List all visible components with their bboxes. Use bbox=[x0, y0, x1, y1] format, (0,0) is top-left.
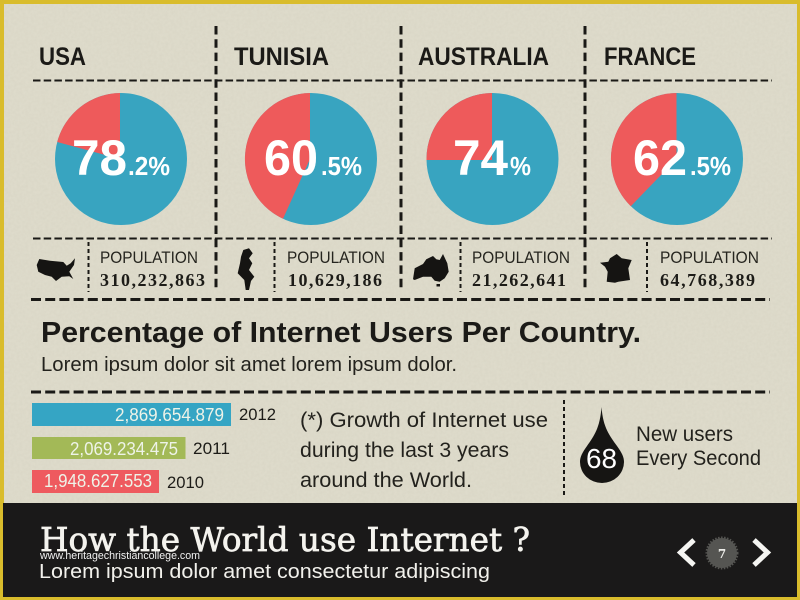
population: Australia: 21,262,641 bbox=[472, 270, 566, 290]
panel: Australia bbox=[413, 43, 570, 290]
panel: USA bbox=[37, 43, 205, 290]
bar chart: internet growth bbox=[32, 403, 276, 493]
text block: new users: Every Second bbox=[636, 446, 761, 470]
population: Tunisia: 10,629,186 bbox=[288, 270, 382, 290]
population: France bbox=[660, 248, 759, 290]
population: USA bbox=[100, 248, 205, 290]
panel: Tunisia bbox=[234, 43, 385, 290]
page badge: 7 bbox=[718, 547, 726, 561]
page badge bbox=[706, 538, 738, 568]
pie chart: Tunisia 60.5%: 60 bbox=[264, 130, 318, 186]
population: France: 64,768,389 bbox=[660, 270, 755, 290]
pie chart: Australia 74%: % bbox=[510, 151, 531, 181]
bar: 2011: 2011 bbox=[193, 439, 230, 458]
bar: 2010 bbox=[32, 470, 204, 493]
pie chart: France 62.5% bbox=[611, 93, 743, 225]
icon: France map bbox=[600, 254, 632, 283]
heading: Australia: AUSTRALIA bbox=[418, 43, 549, 71]
footer subtitle: Lorem ipsum dolor amet consectetur adipiscing bbox=[39, 561, 490, 583]
panel: France bbox=[600, 43, 759, 290]
pie chart: USA 78.2%: 78 bbox=[72, 130, 127, 186]
heading: Tunisia: TUNISIA bbox=[234, 43, 329, 71]
icon: Tunisia map bbox=[238, 248, 254, 290]
population: USA: 310,232,863 bbox=[100, 270, 205, 290]
bar: 2012: 2,869.654.879 bbox=[115, 405, 224, 425]
pie chart: France 62.5%: 62 bbox=[633, 130, 687, 186]
icon: drop with 68 bbox=[580, 407, 624, 483]
text block: new users: New users bbox=[636, 422, 733, 446]
icon: drop with 68: 68 bbox=[586, 443, 617, 474]
bar: 2012: 2012 bbox=[239, 405, 276, 424]
icon: next arrow bbox=[754, 540, 768, 565]
text block: growth note: around the World. bbox=[300, 468, 472, 492]
population: Australia bbox=[472, 248, 570, 290]
footer band bbox=[3, 503, 797, 597]
pie chart: Tunisia 60.5%: .5% bbox=[321, 151, 362, 181]
heading: France: FRANCE bbox=[604, 43, 696, 71]
icon: Australia map bbox=[413, 254, 449, 286]
pie chart: USA 78.2%: .2% bbox=[128, 151, 170, 181]
text block: growth note: during the last 3 years bbox=[300, 438, 509, 462]
heading: USA: USA bbox=[39, 43, 86, 71]
population: Australia: POPULATION bbox=[472, 248, 570, 267]
population: USA: POPULATION bbox=[100, 248, 198, 267]
icon: USA map bbox=[37, 258, 75, 281]
population: France: POPULATION bbox=[660, 248, 759, 267]
footer title: How the World use Internet ? bbox=[40, 520, 530, 559]
text block: growth note: (*) Growth of Internet use bbox=[300, 408, 548, 432]
bar: 2011 bbox=[32, 437, 230, 459]
population: Tunisia bbox=[287, 248, 385, 290]
heading: percentage of internet users: Percentage of Internet Users Per Country. bbox=[41, 317, 641, 349]
watermark: www.heritagechristiancollege.com bbox=[39, 550, 200, 562]
bar: 2010: 1,948.627.553 bbox=[44, 471, 152, 491]
bar: 2010: 2010 bbox=[167, 473, 204, 492]
text block: new users bbox=[636, 422, 761, 470]
pie chart: Australia 74% bbox=[426, 93, 558, 225]
subheading: Lorem ipsum dolor sit amet lorem ipsum dolor. bbox=[41, 354, 457, 376]
bar: 2012 bbox=[32, 403, 276, 426]
text block: growth note bbox=[300, 408, 548, 492]
pie chart: USA 78.2% bbox=[55, 93, 187, 225]
pie chart: Tunisia 60.5% bbox=[245, 93, 377, 225]
pie chart: Australia 74%: 74 bbox=[453, 130, 508, 186]
population: Tunisia: POPULATION bbox=[287, 248, 385, 267]
icon: previous arrow bbox=[680, 540, 694, 565]
pie chart: France 62.5%: .5% bbox=[690, 151, 731, 181]
bar: 2011: 2,069.234.475 bbox=[70, 439, 178, 459]
